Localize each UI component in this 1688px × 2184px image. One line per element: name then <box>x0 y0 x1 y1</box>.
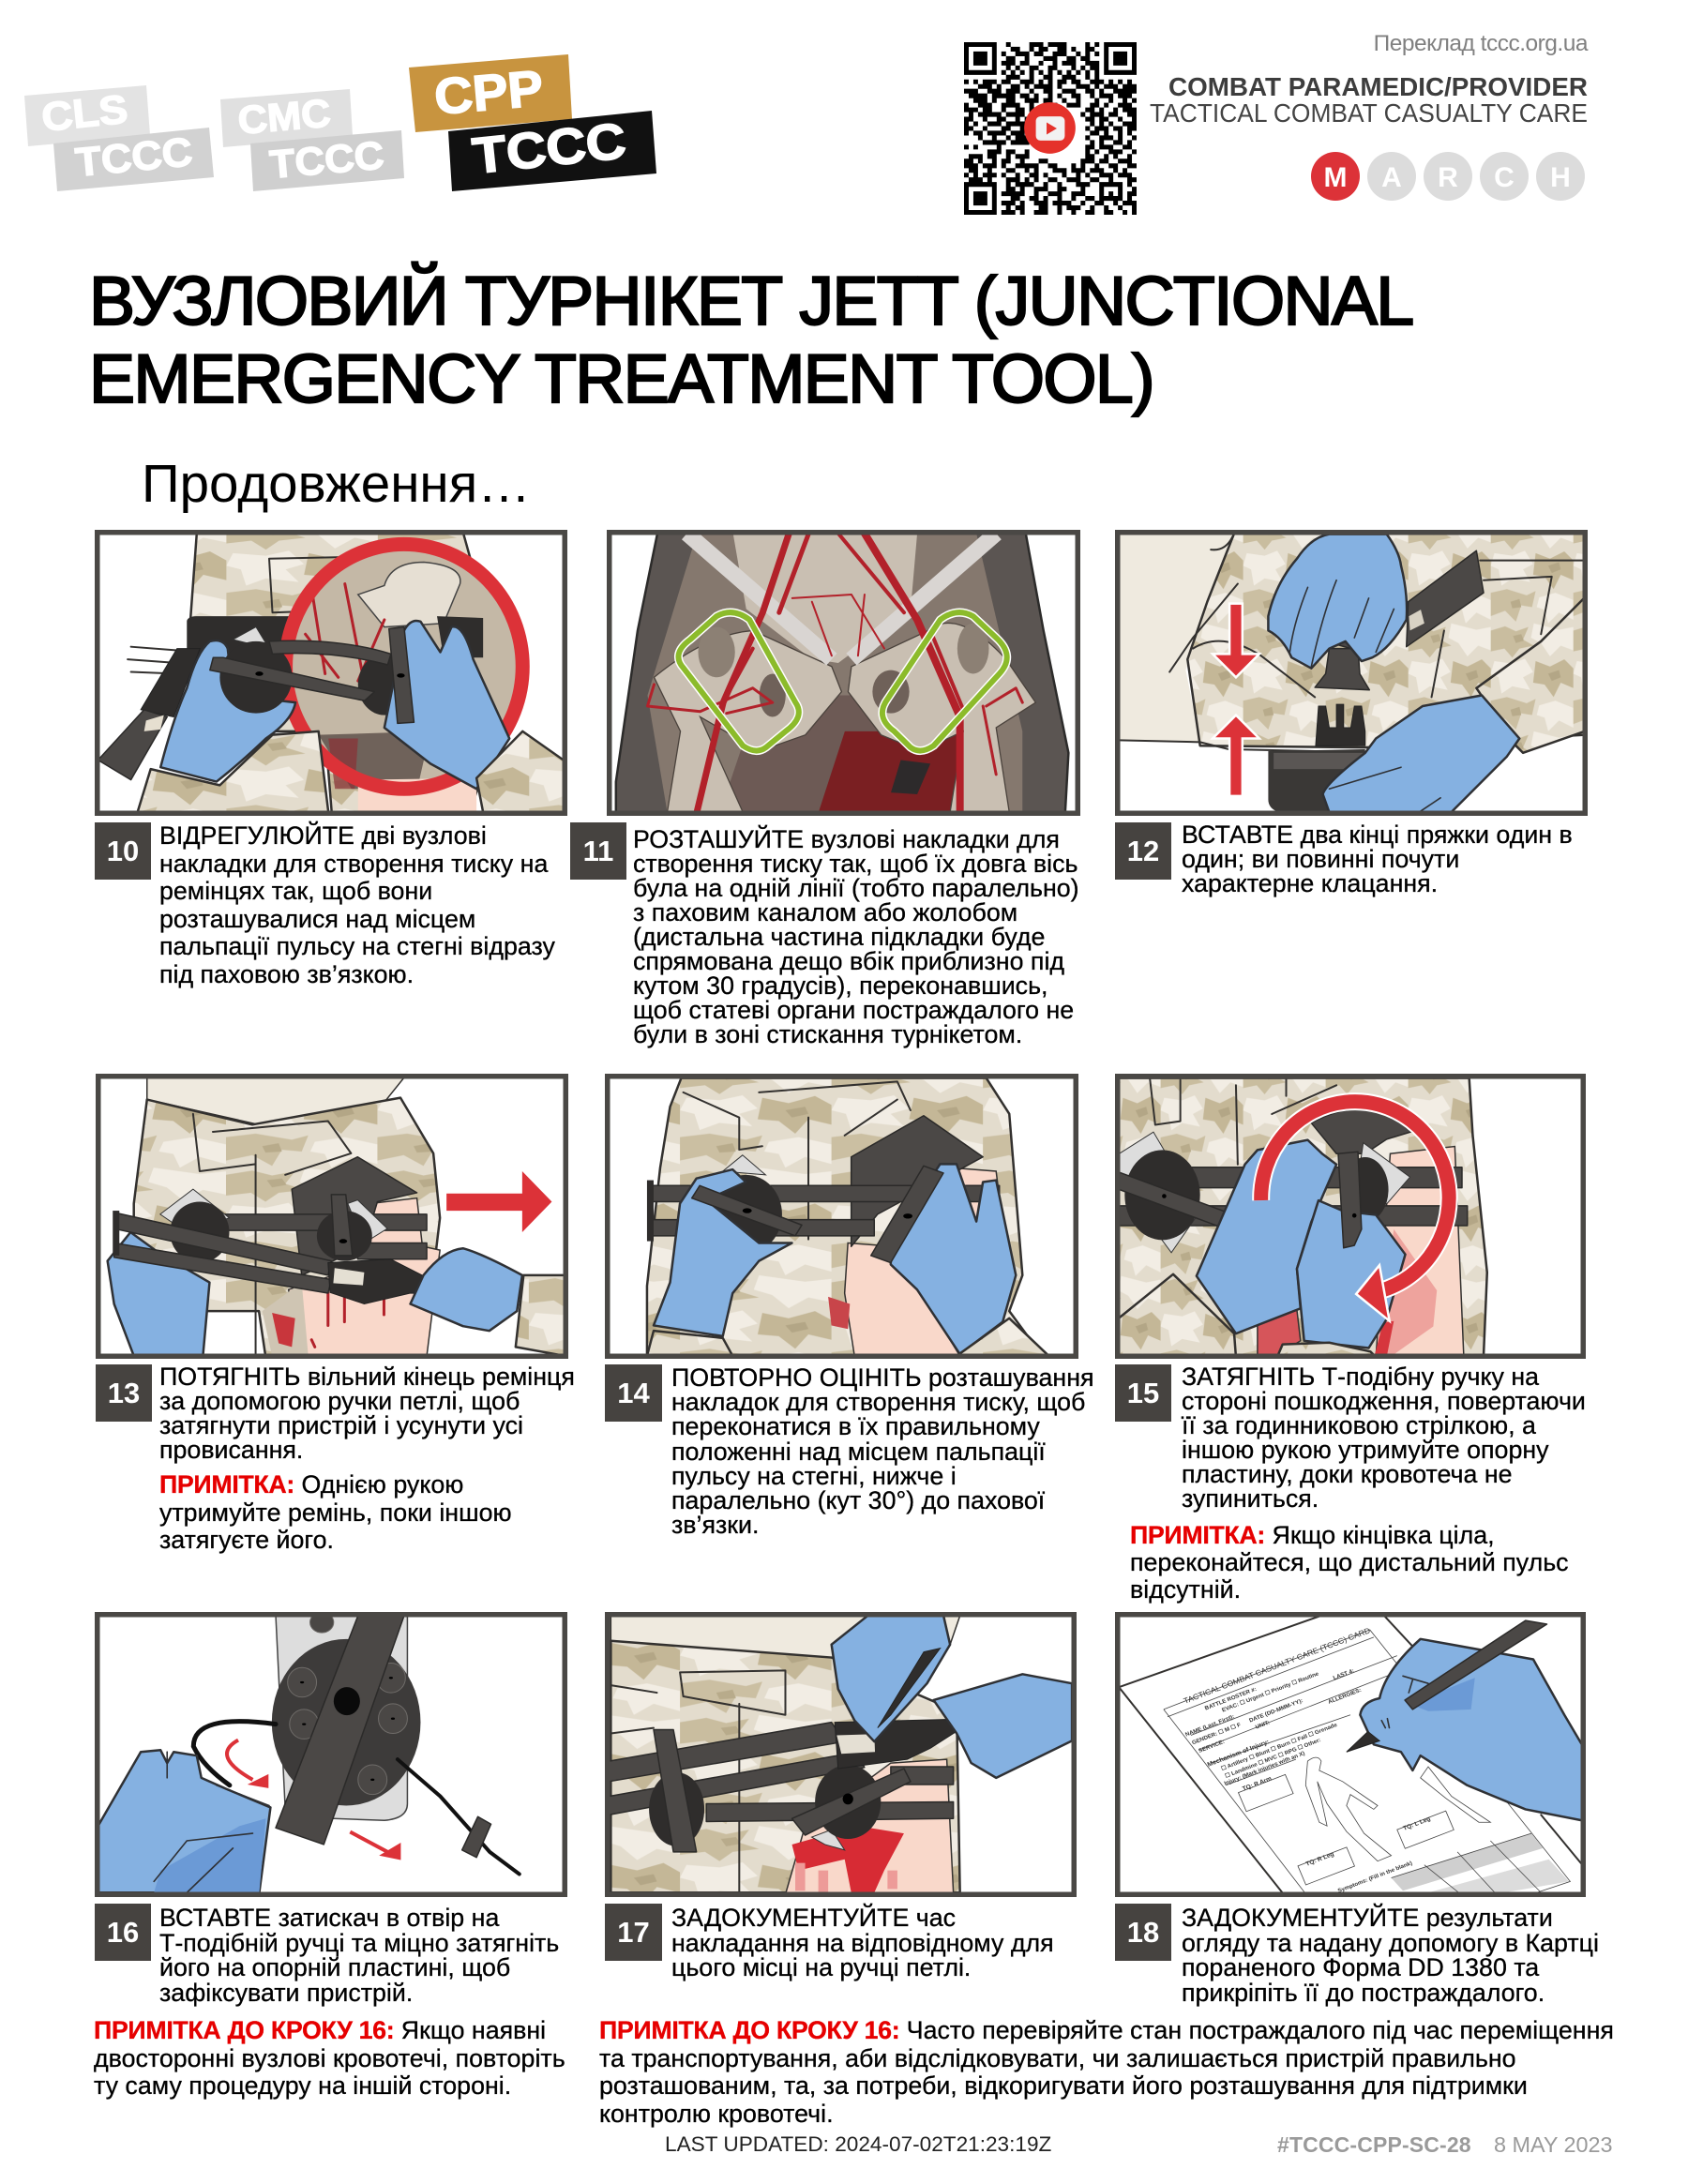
text: step 10: розташувалися над місцем <box>159 904 475 932</box>
straps <box>647 1155 1000 1254</box>
text: step 15: пластину, доки кровотеча не <box>1182 1460 1513 1488</box>
skin with blood <box>1258 1147 1464 1357</box>
title: ВУЗЛОВИЙ ТУРНІКЕТ JETT (JUNCTIONAL <box>89 262 1412 339</box>
text: step 11: з паховим каналом або жолобом <box>633 898 1017 926</box>
pull tab and patch <box>835 1719 976 1769</box>
step number 17 <box>605 1904 662 1961</box>
text: step 11: створення тиску так, щоб їх довга вісь <box>633 850 1078 878</box>
step number 14 <box>605 1364 662 1422</box>
subtitle: continuation: Продовження… <box>142 454 531 513</box>
step number 11: 11 <box>583 835 613 867</box>
text: step 10: накладки для створення тиску на <box>159 850 548 878</box>
glove: hand with pen <box>832 1616 950 1741</box>
note: step 16 monitoring: ПРИМІТКА ДО КРОКУ 16: Часто перевіряйте стан постраждалого під час переміщення <box>599 2016 1614 2044</box>
note: step 13 <box>159 1470 512 1554</box>
logo: CLS CMC CPP TCCC level tags <box>24 54 656 191</box>
text: step 14 <box>671 1363 1094 1539</box>
tag: CMC TCCC: TCCC <box>268 133 385 187</box>
text: step 13: за допомогою ручки петлі, щоб <box>159 1387 520 1415</box>
tag: CPP TCCC: TCCC <box>470 113 628 185</box>
note: step 16 bilateral: двосторонні вузлові кровотечі, повторіть <box>94 2044 565 2072</box>
text: step 11: щоб статеві органи постраждалого не <box>633 996 1074 1024</box>
glove: hand holding tab <box>934 1674 1072 1778</box>
step number 10: 10 <box>107 835 139 867</box>
text: step 16: зафіксувати пристрій. <box>159 1979 413 2007</box>
pressure pads <box>210 627 411 715</box>
note: step 15 <box>1130 1521 1569 1604</box>
text: step 14: ПОВТОРНО ОЦІНІТЬ розташування <box>671 1363 1094 1392</box>
tag: CLS TCCC <box>24 85 214 191</box>
pouch <box>1268 749 1365 812</box>
text: step 16 <box>159 1904 559 2007</box>
note: step 16 bilateral: ПРИМІТКА ДО КРОКУ 16: Якщо наявні <box>94 2016 546 2044</box>
note: step 13: утримуйте ремінь, поки іншою <box>159 1499 512 1527</box>
text: step 10: ремінцях так, щоб вони <box>159 877 432 905</box>
text: step 14: пульсу на стегні, нижче і <box>671 1462 957 1490</box>
text: step 11: була на одній лінії (тобто паралельно) <box>633 874 1079 902</box>
text: step 15: іншою рукою утримуйте опорну <box>1182 1436 1549 1464</box>
long straps <box>113 1211 331 1293</box>
text: step 11: РОЗТАШУЙТЕ вузлові накладки для <box>633 825 1060 853</box>
header: course level text <box>1150 72 1588 128</box>
step number 13 <box>96 1364 152 1422</box>
T handle <box>276 1616 404 1845</box>
MARCH step indicator <box>1311 152 1585 201</box>
tag: CPP TCCC <box>409 54 656 191</box>
illustration: step 16 windlass clip <box>95 1612 567 1897</box>
note: step 16 monitoring: та транспортування, аби відслідковувати, чи залишається пристрій правильно <box>599 2044 1516 2072</box>
skin and blood <box>785 1759 954 1894</box>
note: step 13: затягуєте його. <box>159 1526 334 1554</box>
sleeve <box>1476 598 1585 753</box>
text: step 15 <box>1182 1363 1586 1513</box>
text: step 14: зв’язки. <box>671 1511 759 1539</box>
step number 16 <box>95 1904 151 1961</box>
dark strap plate <box>187 616 483 659</box>
glove: left hand <box>108 1232 209 1356</box>
casualty card form: TQ: R Arm <box>1242 1775 1273 1792</box>
buckle and pull loop <box>98 647 200 780</box>
text: step 11: (дистальна частина підкладки буде <box>633 923 1045 951</box>
text: step 12 <box>1182 821 1573 897</box>
arrow: clockwise rotation <box>1261 1102 1449 1321</box>
MARCH step indicator: C <box>1494 162 1515 193</box>
note: step 15: відсутній. <box>1130 1575 1241 1604</box>
casualty card form: BATTLE ROSTER #: <box>1204 1687 1258 1711</box>
pelvic bands <box>687 534 832 659</box>
glove: front hand <box>1297 1200 1406 1348</box>
note: step 16 bilateral <box>94 2016 565 2100</box>
casualty card form: LAST 4: <box>1333 1668 1355 1681</box>
straps and pads <box>160 1189 427 1263</box>
casualty card form: TACTICAL COMBAT CASUALTY CARE (TCCC) CARD <box>1183 1626 1372 1706</box>
text: step 11: спрямована дещо вбік приблизно під <box>633 947 1064 975</box>
glove: left hand <box>654 1169 791 1336</box>
illustration: step 14 reassess pads <box>605 1074 1078 1359</box>
strap tab <box>1407 550 1484 647</box>
text: step 12: ВСТАВТЕ два кінці пряжки один в <box>1182 821 1573 849</box>
buckle parts <box>1315 606 1369 746</box>
glove: upper hand <box>1268 535 1407 669</box>
dark plate <box>292 1157 417 1275</box>
note: step 15: ПРИМІТКА: Якщо кінцівка ціла, <box>1130 1521 1495 1549</box>
step number 17: 17 <box>617 1916 650 1949</box>
cord <box>193 1722 520 1875</box>
step number 15: 15 <box>1127 1377 1159 1409</box>
icon: video play badge <box>1024 102 1075 154</box>
text: step 16: Т-подібній ручці та міцно затягніть <box>159 1928 559 1956</box>
text: step 16: ВСТАВТЕ затискач в отвір на <box>159 1904 499 1932</box>
note: step 16 monitoring: контролю кровотечі. <box>599 2100 834 2128</box>
header: course level text: COMBAT PARAMEDIC/PROVIDER <box>1168 72 1588 101</box>
glove: back hand <box>1197 1140 1336 1333</box>
text: step 18: прикріпіть її до постраждалого. <box>1182 1979 1545 2007</box>
text: step 13 <box>159 1363 575 1464</box>
glove: pinching hand <box>98 1750 270 1892</box>
text: step 10 <box>159 821 555 988</box>
vitals table <box>1392 1833 1569 1896</box>
casualty card form: DATE (DD-MMM-YY): <box>1248 1698 1304 1724</box>
sleeve <box>516 1275 565 1356</box>
text: step 12: характерне клацання. <box>1182 869 1438 897</box>
illustration: step 12 buckle <box>1115 530 1588 816</box>
tag: CPP TCCC: CPP <box>432 60 546 126</box>
title <box>89 261 1413 418</box>
glove: writing hand <box>1360 1639 1582 1820</box>
illustration: step 15 twist handle <box>1115 1074 1586 1359</box>
casualty card form: TQ: L Leg <box>1402 1815 1432 1832</box>
T handle <box>1338 1152 1362 1248</box>
arteries <box>647 534 1022 812</box>
illustration: step 11 pad placement anatomy <box>607 530 1080 816</box>
illustration: step 13 pull strap <box>96 1074 568 1359</box>
footer: date: 8 MAY 2023 <box>1494 2132 1613 2157</box>
arrow: curved insert <box>227 1740 252 1780</box>
casualty card form: TQ: R Leg <box>1305 1851 1335 1868</box>
text: step 11: кутом 30 градусів), переконавшись, <box>633 972 1048 1000</box>
step number 16: 16 <box>107 1916 139 1949</box>
casualty card form: Injury: (Mark injuries with an X) <box>1224 1751 1306 1787</box>
note: step 16 bilateral: ту саму процедуру на іншій стороні. <box>94 2071 511 2100</box>
text: step 13: ПОТЯГНІТЬ вільний кінець ремінця <box>159 1363 575 1391</box>
MARCH step indicator: A <box>1381 162 1402 193</box>
step number 14: 14 <box>617 1377 650 1409</box>
title: EMERGENCY TREATMENT TOOL) <box>89 339 1153 417</box>
casualty card form: UNIT: <box>1255 1720 1271 1731</box>
text: step 13: провисання. <box>159 1436 303 1464</box>
arrow: pull away <box>350 1832 391 1854</box>
glove: left hand <box>160 640 295 782</box>
casualty card form: EVAC: ☐ Urgent ☐ Priority ☐ Routine <box>1221 1670 1320 1713</box>
text: step 17: цього місці на ручці петлі. <box>671 1953 971 1981</box>
casualty card form: ALLERGIES: <box>1328 1688 1363 1706</box>
text: step 11: були в зоні стискання турнікетом. <box>633 1020 1022 1048</box>
pressure pads and handles <box>649 1730 911 1852</box>
tag: CMC TCCC: CMC <box>236 91 332 143</box>
text: step 16: його на опорній пластині, щоб <box>159 1953 510 1981</box>
footer: last updated: LAST UPDATED: 2024-07-02T21:23:19Z <box>665 2132 1051 2156</box>
text: step 15: стороні пошкодження, повертаючи <box>1182 1387 1586 1415</box>
text: step 10: під паховою зв’язкою. <box>159 960 414 988</box>
tag: CMC TCCC <box>220 89 404 191</box>
sleeves <box>1118 1274 1236 1357</box>
text: step 10: пальпації пульсу на стегні відразу <box>159 932 555 960</box>
clipboard <box>1119 1615 1584 1896</box>
note: step 16 monitoring <box>599 2016 1614 2128</box>
skin below tourniquet <box>358 778 476 812</box>
glove: right hand <box>891 1164 1016 1354</box>
text: step 15: ЗАТЯГНІТЬ Т-подібну ручку на <box>1182 1363 1539 1391</box>
text: step 18: ЗАДОКУМЕНТУЙТЕ результати <box>1182 1904 1553 1932</box>
body diagram <box>1305 1757 1490 1861</box>
illustration: step 17 document time <box>605 1612 1077 1897</box>
text: step 13: затягнути пристрій і усунути усі <box>159 1411 523 1439</box>
step number 18 <box>1115 1904 1171 1961</box>
casualty card form <box>1164 1626 1570 1896</box>
step number 15 <box>1115 1364 1171 1422</box>
note: step 15: переконайтеся, що дистальний пульс <box>1130 1548 1569 1576</box>
credit: translation source: Переклад tccc.org.ua <box>1374 31 1588 56</box>
step number 12 <box>1115 822 1171 880</box>
glove: right hand <box>384 621 509 789</box>
text: step 17: ЗАДОКУМЕНТУЙТЕ час <box>671 1904 956 1932</box>
casualty card form: GENDER: ☐ M ☐ F <box>1191 1722 1243 1746</box>
step number 11 <box>570 822 626 880</box>
QR code with video badge <box>964 42 1137 215</box>
MARCH step indicator: H <box>1550 162 1571 193</box>
text: step 11 <box>633 825 1079 1048</box>
MARCH step indicator: R <box>1438 162 1458 193</box>
illustration: step 18 casualty card <box>1115 1612 1586 1897</box>
text: step 14: положенні над місцем пальпації <box>671 1438 1046 1466</box>
MARCH step indicator: M <box>1324 162 1347 193</box>
plate <box>852 1116 983 1246</box>
arrow: down press <box>1213 604 1259 677</box>
step number 18: 18 <box>1127 1916 1159 1949</box>
text: step 12: один; ви повинні почути <box>1182 845 1459 873</box>
text: step 17: накладання на відповідному для <box>671 1928 1054 1956</box>
text: step 14: накладок для створення тиску, щоб <box>671 1388 1085 1416</box>
tag: CLS TCCC: TCCC <box>73 129 194 186</box>
pull tab <box>328 1259 446 1303</box>
text: step 10: ВІДРЕГУЛЮЙТЕ дві вузлові <box>159 821 487 850</box>
step number 12: 12 <box>1127 835 1159 867</box>
casualty card form: ☐ Artillery ☐ Blunt ☐ Burn ☐ Fall ☐ Grenade <box>1220 1722 1339 1772</box>
tag: CLS TCCC: CLS <box>39 87 130 141</box>
arrow: pull direction <box>446 1171 551 1232</box>
step number 10 <box>95 822 151 880</box>
text: step 18 <box>1182 1904 1599 2007</box>
sleeves <box>138 731 328 812</box>
note: step 16 monitoring: розташованим, та, за потреби, відкоригувати його розташування для підтримки <box>599 2071 1528 2100</box>
text: step 17 <box>671 1904 1054 1981</box>
pad zones: green outlines <box>678 612 1007 751</box>
footer: document id: #TCCC-CPP-SC-28 <box>1277 2132 1471 2157</box>
casualty card form: ☐ Landmine ☐ MVC ☐ RPG ☐ Other: <box>1224 1737 1322 1780</box>
pelvis and femurs <box>655 534 1035 812</box>
glove: lower hand <box>1323 695 1519 812</box>
casualty card form: NAME (Last, First): <box>1184 1714 1236 1738</box>
note: step 13: ПРИМІТКА: Однією рукою <box>159 1470 463 1499</box>
cord clip <box>462 1816 491 1858</box>
casualty card form: Mechanism of Injury: <box>1207 1739 1271 1769</box>
text: step 15: зупиниться. <box>1182 1484 1319 1513</box>
straps <box>609 1723 954 1821</box>
text: step 18: огляду та надану допомогу в Картці <box>1182 1928 1599 1956</box>
text: step 14: паралельно (кут 30°) до пахової <box>671 1486 1045 1514</box>
plate arc <box>1311 1109 1423 1153</box>
straps <box>1118 1132 1468 1253</box>
text: step 18: пораненого Форма DD 1380 та <box>1182 1953 1539 1981</box>
casualty card form: Symptoms: (Fill in the blank) <box>1337 1860 1413 1894</box>
pen <box>1405 1620 1547 1710</box>
arrow: up press <box>1213 715 1259 796</box>
text: step 14: переконатися в їх правильному <box>671 1412 1040 1440</box>
thigh skin <box>263 1198 440 1356</box>
skin <box>828 1167 1006 1356</box>
illustration: step 10 adjust pads <box>95 530 567 816</box>
text: step 15: її за годинниковою стрілкою, а <box>1182 1411 1536 1439</box>
red prohibition circle area <box>289 544 520 789</box>
casualty card form: SERVICE: <box>1198 1740 1226 1755</box>
glove: right hand <box>411 1248 522 1331</box>
sleeves <box>647 1331 732 1356</box>
step number 13: 13 <box>108 1377 140 1409</box>
